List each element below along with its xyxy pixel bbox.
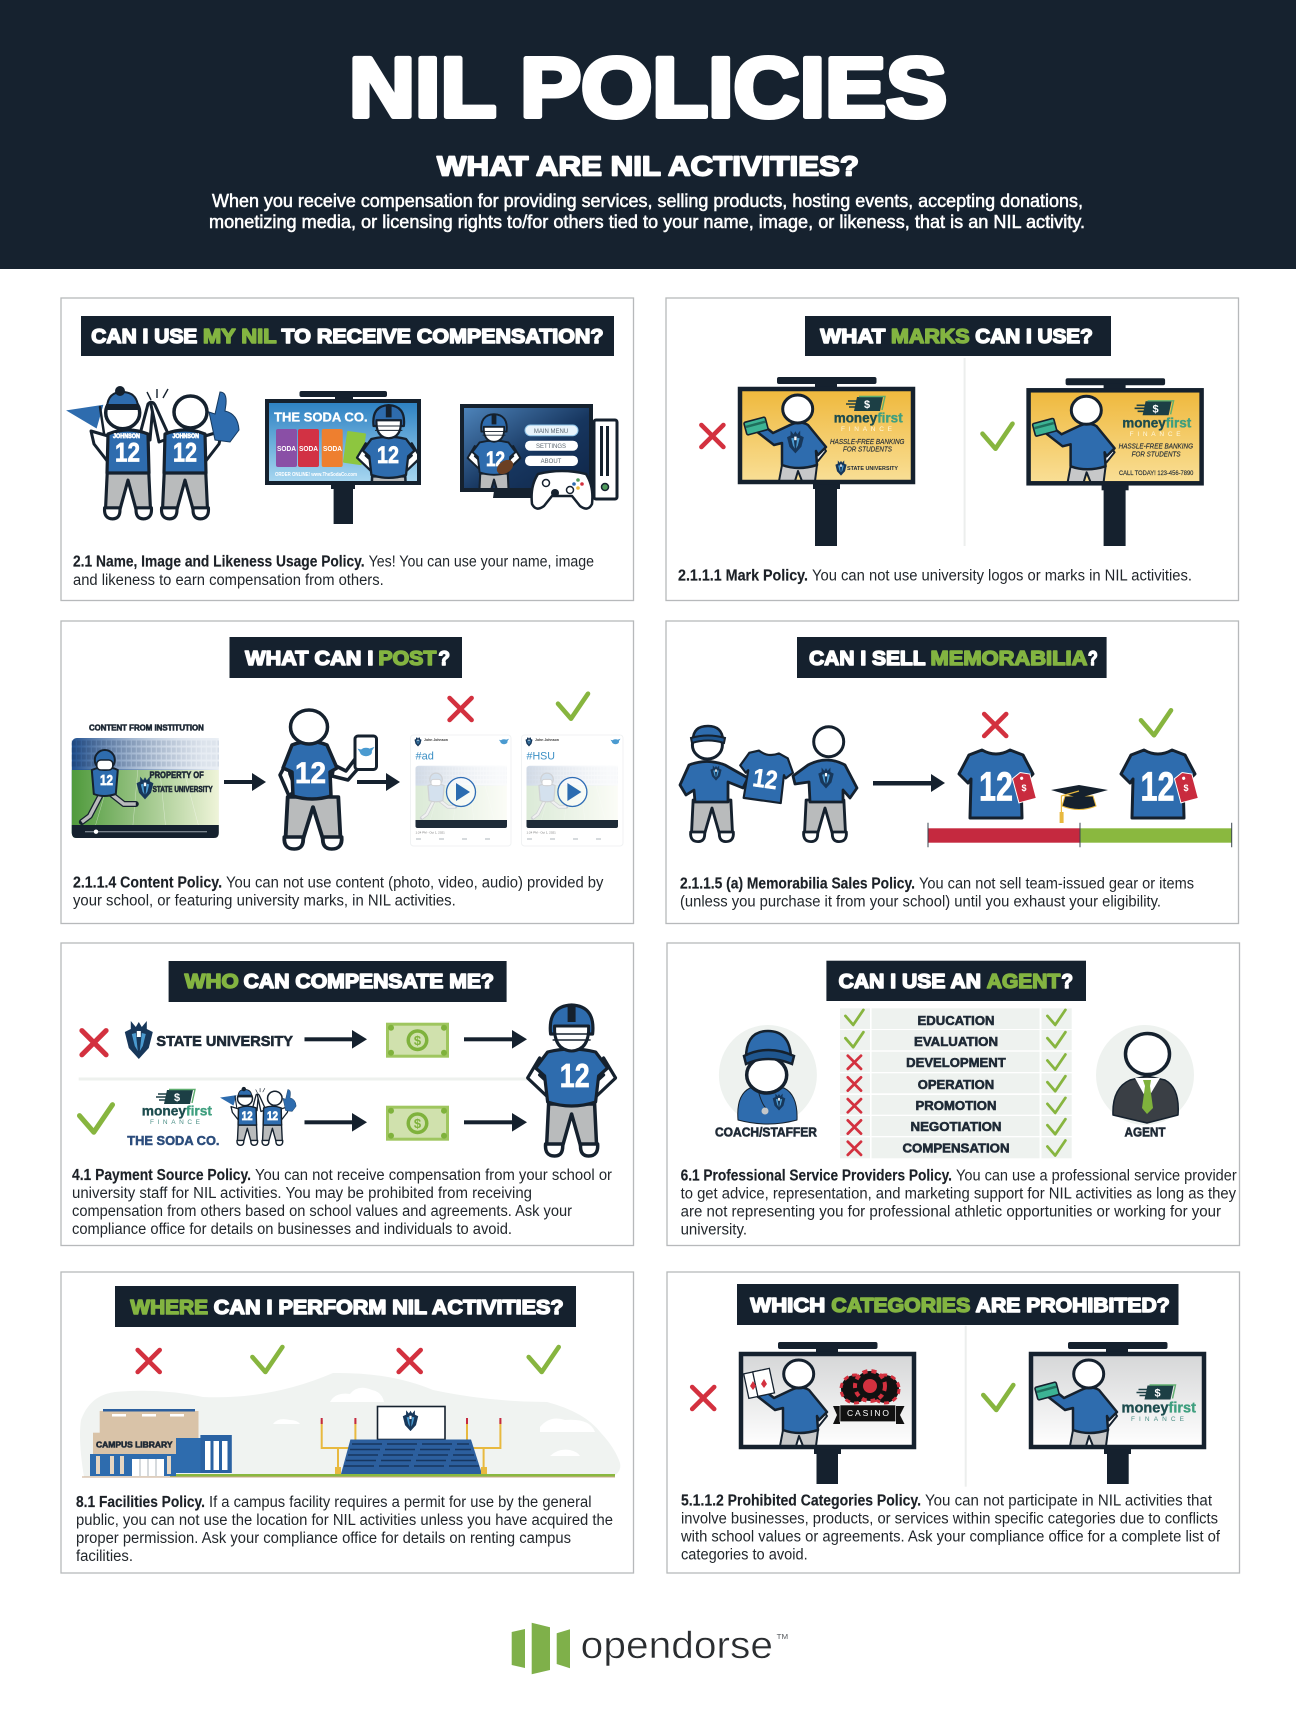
mini fans: 12 — [242, 1109, 253, 1123]
jersey for sale: after: $ — [1183, 783, 1189, 793]
text: prohibited categories policy — [680, 1493, 1221, 1564]
icon: graduation cap — [1051, 785, 1108, 823]
heading: compensation: TO RECEIVE COMPENSATION? — [282, 326, 604, 348]
illustration: soda billboard: THE SODA CO. — [274, 410, 368, 425]
agent avatar: AGENT — [1124, 1125, 1166, 1140]
heading: memorabilia — [797, 637, 1107, 678]
sponsor logos: THE SODA CO. — [127, 1133, 220, 1148]
activity table: DEVELOPMENT — [906, 1055, 1006, 1070]
billboard: with university logo: STATE UNIVERSITY — [847, 466, 898, 472]
billboard: without university logo: CALL TODAY! 123-456-7890 — [1119, 470, 1194, 477]
illustration: soda billboard: 12 — [377, 442, 399, 469]
icon: green check — [529, 1347, 559, 1372]
illustration: player posting from phone — [280, 710, 376, 849]
billboard: without university logo: HASSLE-FREE BANKING — [1119, 441, 1193, 450]
footer logo: opendorse — [512, 1623, 788, 1674]
text: prohibited categories policy: You can not participate in NIL activities that — [925, 1493, 1213, 1510]
text: professional service providers policy: 6.1 Professional Service Providers Policy. — [681, 1168, 952, 1185]
text: usage policy — [73, 554, 594, 589]
text: facilities policy — [76, 1494, 613, 1565]
tweet: #ad: John Johnson — [424, 738, 448, 742]
activity table: PROMOTION — [916, 1098, 996, 1113]
sponsor logos: FINANCE — [150, 1119, 201, 1126]
activity table — [840, 1008, 1072, 1158]
billboard: without university logo: FOR STUDENTS — [1132, 449, 1181, 458]
arrow — [224, 773, 266, 791]
heading: compensate: WHO — [185, 971, 239, 993]
heading: agent: CAN I USE AN — [839, 971, 981, 993]
illustration: video game on tv: ABOUT — [541, 459, 562, 465]
heading: where: WHERE — [130, 1297, 208, 1319]
tweet: #HSU: John Johnson — [535, 738, 559, 742]
panel: what marks can I use — [666, 298, 1238, 600]
text: memorabilia policy: You can not sell team-issued gear or items — [919, 876, 1194, 893]
text: payment source policy: You can not receive compensation from your school or — [255, 1167, 612, 1184]
icon: green check — [1141, 710, 1171, 735]
panel: can I sell memorabilia — [666, 621, 1238, 924]
text: prohibited categories policy: 5.1.1.2 Prohibited Categories Policy. — [681, 1493, 921, 1510]
illustration: coach handing jersey to student — [680, 726, 857, 842]
tweet: #HSU — [522, 735, 623, 846]
text: facilities policy: facilities. — [76, 1548, 133, 1565]
tweet: #ad: 1:24 PM - Oct 1, 2021 — [416, 830, 445, 834]
heading: categories: CATEGORIES — [831, 1295, 970, 1317]
illustration: coach handing jersey to student: 12 — [751, 764, 779, 795]
agent avatar — [1096, 1025, 1194, 1140]
icon: red x — [450, 698, 472, 720]
illustration: video game on tv — [462, 406, 617, 509]
text: prohibited categories policy: involve businesses, products, or services within specific categories due to conflicts — [681, 1511, 1218, 1528]
jersey for sale: after — [1121, 750, 1198, 818]
billboard: with university logo: moneyfirst — [834, 410, 903, 426]
jersey for sale: before: $ — [1021, 783, 1027, 793]
heading: post — [230, 637, 462, 678]
illustration: player posting from phone: 12 — [295, 757, 326, 790]
text: professional service providers policy: university. — [681, 1222, 747, 1239]
text: payment source policy: compliance office for details on businesses and individuals to avoid. — [72, 1221, 512, 1238]
billboard: without university logo: $ — [1153, 403, 1159, 415]
illustration: soda billboard: ORDER ONLINE! www.TheSodaCo.com — [275, 472, 357, 478]
billboard: without university logo: moneyfirst — [1122, 414, 1192, 430]
arrow — [464, 1113, 527, 1132]
mini fans — [221, 1087, 296, 1145]
tweet: #HSU: #HSU — [526, 750, 555, 762]
subtitle: WHAT ARE NIL ACTIVITIES? — [437, 150, 859, 182]
heading: agent: AGENT — [987, 971, 1060, 993]
illustration: two fans high-fiving: JOHNSON — [113, 433, 140, 440]
icon: green check — [80, 1105, 112, 1132]
billboard: casino: CASINO — [847, 1408, 889, 1418]
text: professional service providers policy: to get advice, representation, and marketing support for NIL activities as long as they — [681, 1186, 1236, 1203]
timeline bar — [928, 823, 1232, 847]
text: usage policy: Yes! You can use your name, image — [369, 554, 594, 571]
panel: can I use my NIL — [61, 298, 634, 600]
billboard: moneyfirst — [1031, 1342, 1204, 1484]
sponsor logos — [127, 1090, 220, 1148]
mini fans: 12 — [267, 1109, 278, 1123]
icon: green check — [252, 1347, 282, 1372]
text: memorabilia policy — [680, 876, 1194, 911]
activity table: EVALUATION — [914, 1034, 998, 1049]
arrow — [464, 1030, 527, 1049]
text: facilities policy: public, you can not use the location for NIL activities unless you have acquired the — [76, 1512, 613, 1529]
heading: agent — [826, 961, 1086, 1001]
billboard: moneyfirst: moneyfirst — [1122, 1399, 1196, 1416]
billboard: with university logo: HASSLE-FREE BANKING — [830, 437, 905, 446]
campus library — [90, 1409, 232, 1476]
heading: post: POST — [378, 648, 436, 670]
activity table: NEGOTIATION — [910, 1119, 1002, 1134]
illustration: two fans high-fiving: 12 — [173, 438, 197, 468]
university logo: STATE UNIVERSITY — [156, 1034, 293, 1050]
text: content policy: 2.1.1.4 Content Policy. — [73, 875, 222, 892]
illustration: video game on tv: MAIN MENU — [534, 429, 568, 435]
text: professional service providers policy: are not representing you for professional athletic opportunities or working for your — [681, 1204, 1221, 1221]
heading: memorabilia: MEMORABILIA — [930, 648, 1087, 670]
heading: compensate — [169, 961, 507, 1002]
player: 12 — [560, 1057, 590, 1094]
illustration: institution video — [72, 724, 219, 838]
icon: red x — [82, 1031, 106, 1055]
illustration: soda billboard: SODA — [323, 446, 342, 453]
campus landscape background — [80, 1373, 620, 1477]
intro text: monetizing media, or licensing rights to/for others tied to your name, image, or likeness, that is an NIL activity. — [209, 211, 1085, 232]
title: NIL POLICIES — [349, 40, 947, 134]
icon: red x — [701, 425, 723, 447]
jersey for sale: before — [959, 750, 1036, 818]
header band — [0, 0, 1296, 269]
billboard: with university logo: FINANCE — [841, 426, 893, 433]
panel: which categories are prohibited — [667, 1272, 1240, 1573]
text: payment source policy: 4.1 Payment Source Policy. — [72, 1167, 251, 1184]
stadium — [322, 1406, 500, 1474]
billboard: with university logo — [740, 377, 913, 546]
text: professional service providers policy: You can use a professional service provider — [956, 1168, 1237, 1185]
icon: green check — [558, 694, 588, 719]
billboard: moneyfirst: $ — [1154, 1388, 1161, 1400]
text: mark policy: 2.1.1.1 Mark Policy. — [678, 568, 808, 585]
icon: dollar bill: $ — [414, 1116, 422, 1131]
intro text — [209, 190, 1085, 232]
text: prohibited categories policy: with school values or agreements. Ask your compliance office for a complete list of — [680, 1529, 1221, 1546]
icon: red x — [984, 714, 1006, 736]
text: content policy: You can not use content (photo, video, audio) provided by — [226, 875, 604, 892]
footer logo: opendorse: TM — [777, 1632, 788, 1641]
heading: where — [115, 1286, 576, 1327]
text: content policy: your school, or featuring university marks, in NIL activities. — [73, 893, 456, 910]
billboard: casino — [741, 1342, 914, 1484]
arrow — [357, 773, 400, 791]
heading: categories: WHICH — [750, 1295, 825, 1317]
icon: dollar bill — [386, 1023, 449, 1058]
heading: post: ? — [438, 648, 450, 670]
text: prohibited categories policy: categories to avoid. — [681, 1547, 808, 1564]
illustration: soda billboard: SODA — [299, 446, 318, 453]
billboard: without university logo: FINANCE — [1130, 431, 1181, 438]
text: facilities policy: If a campus facility requires a permit for use by the general — [209, 1494, 592, 1511]
tweet: #ad: #ad — [416, 750, 434, 762]
tweet: #HSU: 1:24 PM - Oct 1, 2021 — [526, 830, 556, 834]
heading: post: WHAT CAN I — [245, 648, 373, 670]
illustration: institution video: CONTENT FROM INSTITUTION — [89, 724, 204, 733]
heading: categories: ARE PROHIBITED? — [976, 1295, 1170, 1317]
intro text: When you receive compensation for providing services, selling products, hosting events, accepting donations, — [212, 190, 1083, 211]
text: professional service providers policy — [681, 1168, 1237, 1239]
text: memorabilia policy: 2.1.1.5 (a) Memorabilia Sales Policy. — [680, 876, 915, 893]
illustration: two fans high-fiving: JOHNSON — [172, 433, 199, 440]
panel: can I use an agent — [667, 943, 1240, 1246]
campus library: CAMPUS LIBRARY — [96, 1439, 173, 1449]
activity table: OPERATION — [918, 1077, 994, 1092]
text: payment source policy — [72, 1167, 612, 1238]
icon: red x — [399, 1350, 421, 1372]
illustration: two fans high-fiving: 12 — [115, 438, 140, 468]
heading: compensation — [81, 316, 614, 356]
player — [528, 1005, 616, 1156]
text: facilities policy: proper permission. Ask your compliance office for details on renting campus — [76, 1530, 571, 1547]
activity table: EDUCATION — [918, 1013, 994, 1028]
panel: who can compensate me — [61, 943, 634, 1246]
heading: categories — [737, 1284, 1178, 1325]
panel: what can I post — [61, 621, 634, 924]
billboard: without university logo — [1029, 378, 1202, 546]
icon: red x — [138, 1350, 160, 1372]
heading: marks — [805, 316, 1111, 356]
heading: marks: CAN I USE? — [975, 326, 1093, 348]
text: facilities policy: 8.1 Facilities Policy. — [76, 1494, 205, 1511]
icon: green check — [983, 1385, 1013, 1410]
text: content policy — [73, 875, 604, 910]
footer logo: opendorse: opendorse — [581, 1625, 773, 1667]
heading: agent: ? — [1061, 971, 1073, 993]
illustration: soda billboard: SODA — [277, 446, 296, 453]
activity table: COMPENSATION — [902, 1141, 1010, 1156]
illustration: two fans high-fiving — [69, 386, 239, 519]
arrow — [304, 1030, 367, 1049]
icon: dollar bill: $ — [414, 1033, 422, 1048]
icon: red x — [692, 1387, 714, 1409]
text: memorabilia policy: (unless you purchase it from your school) until you exhaust your eligibility. — [680, 894, 1161, 911]
sponsor logos: moneyfirst — [142, 1103, 212, 1119]
illustration: institution video: 12 — [100, 772, 113, 789]
jersey for sale: before: 12 — [979, 764, 1013, 810]
illustration: video game on tv: SETTINGS — [536, 444, 566, 450]
panel: where can I perform NIL activities — [61, 1272, 634, 1573]
illustration: institution video: STATE UNIVERSITY — [153, 784, 213, 794]
icon: green check — [982, 424, 1012, 449]
text: mark policy: You can not use university logos or marks in NIL activities. — [812, 568, 1192, 585]
coach avatar: COACH/STAFFER — [715, 1125, 818, 1140]
arrow — [304, 1113, 367, 1132]
heading: memorabilia: ? — [1088, 648, 1098, 670]
text: payment source policy: university staff for NIL activities. You may be prohibited from receiving — [72, 1185, 532, 1202]
heading: compensate: CAN COMPENSATE ME? — [244, 971, 494, 993]
heading: marks: WHAT — [820, 326, 885, 348]
text: usage policy: 2.1 Name, Image and Likeness Usage Policy. — [73, 554, 365, 571]
heading: marks: MARKS — [891, 326, 970, 348]
billboard: with university logo: $ — [864, 399, 870, 411]
illustration: video game on tv: 12 — [486, 448, 505, 471]
tweet: #ad — [410, 735, 511, 846]
illustration: soda billboard — [265, 391, 421, 524]
heading: compensation: MY NIL — [203, 326, 277, 348]
coach avatar — [715, 1025, 818, 1140]
university logo — [125, 1021, 293, 1059]
illustration: institution video: PROPERTY OF — [150, 770, 204, 781]
arrow — [873, 774, 945, 792]
text: usage policy: and likeness to earn compensation from others. — [73, 572, 384, 589]
heading: memorabilia: CAN I SELL — [809, 648, 926, 670]
heading: where: CAN I PERFORM NIL ACTIVITIES? — [214, 1297, 564, 1319]
heading: compensation: CAN I USE — [91, 326, 197, 348]
billboard: moneyfirst: FINANCE — [1131, 1416, 1185, 1423]
jersey for sale: after: 12 — [1140, 764, 1174, 810]
sponsor logos: $ — [174, 1092, 180, 1104]
ground — [82, 1474, 615, 1478]
icon: dollar bill — [386, 1106, 449, 1141]
text: payment source policy: compensation from others based on school values and agreements. Ask your — [72, 1203, 572, 1220]
billboard: with university logo: FOR STUDENTS — [843, 445, 892, 454]
